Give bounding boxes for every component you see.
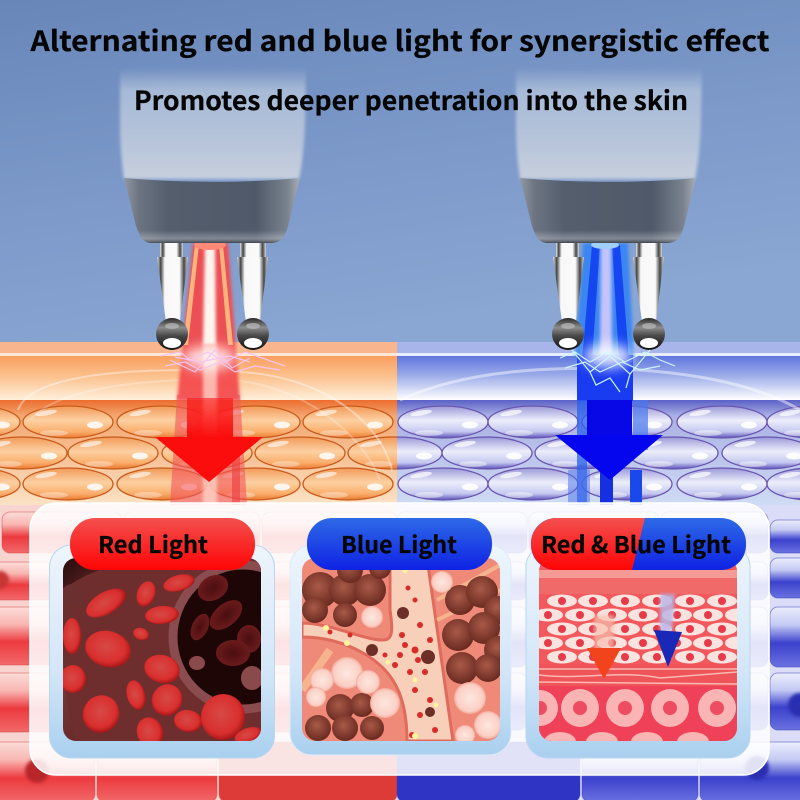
card: red light: [49, 518, 275, 758]
arrow: blue down: [555, 400, 663, 480]
skin layers: blue side: [397, 342, 800, 505]
label pill: blue light: Blue Light: [341, 526, 457, 560]
image: cells and vessels: [302, 557, 512, 745]
small arrow: orange: [587, 615, 621, 679]
image: red blood cells: [63, 558, 261, 741]
left probe: [156, 243, 188, 350]
arrow: red down: [155, 398, 263, 482]
label pill: red and blue: [531, 518, 746, 570]
background blocks: blue side: [397, 505, 800, 800]
card frame: [526, 545, 750, 758]
subtitle: Promotes deeper penetration into the skin: [134, 81, 688, 118]
right probe: [237, 243, 269, 350]
device head: red side: [120, 68, 306, 350]
card: red and blue light: [522, 518, 750, 758]
image: skin cross-section: [539, 564, 737, 741]
label pill: blue light: [307, 518, 492, 570]
device upper body: [120, 68, 306, 179]
device head: blue side: [516, 68, 702, 350]
label pill: red light: Red Light: [98, 526, 208, 560]
skin cells: blue side: [352, 406, 800, 500]
light swirl: red side: [18, 370, 392, 480]
device dark collar: [124, 178, 300, 243]
sky background: [0, 0, 800, 345]
blood-spot blobs on blocks: [0, 571, 800, 783]
electric spark: red side: [160, 346, 285, 372]
blue light beam: [568, 241, 648, 505]
skin layers: red side: [0, 342, 397, 505]
background blocks: red side: [0, 505, 397, 800]
red light beam: [170, 240, 247, 505]
card frame: [50, 545, 274, 758]
frosted white panel: [30, 503, 769, 775]
skin cells: red side: [0, 406, 438, 500]
small arrow: blue: [654, 594, 682, 667]
card: blue light: [290, 518, 512, 755]
card frame: [290, 545, 511, 755]
light swirl: blue side: [400, 368, 800, 410]
electric spark: blue side: [560, 344, 675, 392]
label pill: red and blue: Red & Blue Light: [541, 526, 731, 560]
title: Alternating red and blue light for synergistic effect: [29, 20, 770, 60]
label pill: red light: [70, 518, 255, 570]
